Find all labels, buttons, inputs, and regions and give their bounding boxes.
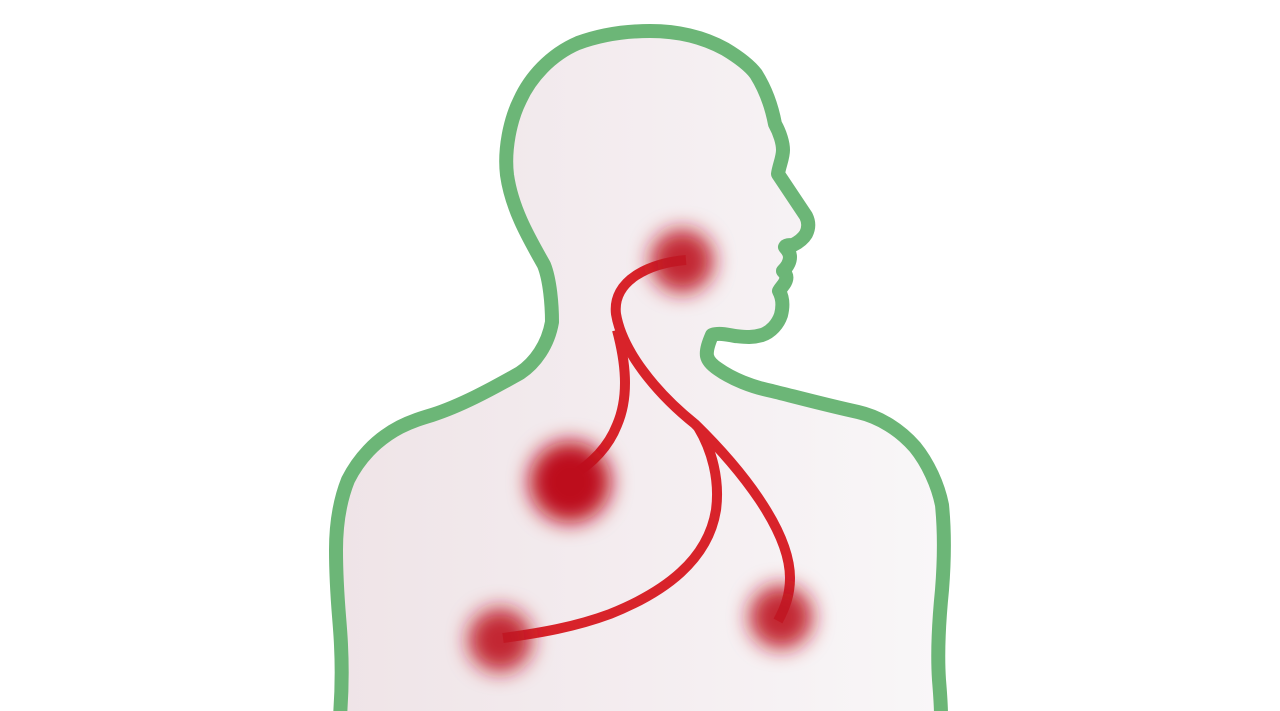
- body silhouette with green outline: [336, 31, 944, 711]
- red pathway: branch to lower left chest: [503, 427, 717, 638]
- lesion spot: lower left chest: [468, 608, 532, 672]
- lesion spot: jaw: [650, 229, 714, 293]
- red pathway: neck to right chest: [616, 260, 790, 621]
- lesion spot: centre chest: [529, 441, 611, 523]
- lesion spot: right chest: [749, 585, 813, 649]
- red pathway: branch to centre chest: [570, 330, 625, 477]
